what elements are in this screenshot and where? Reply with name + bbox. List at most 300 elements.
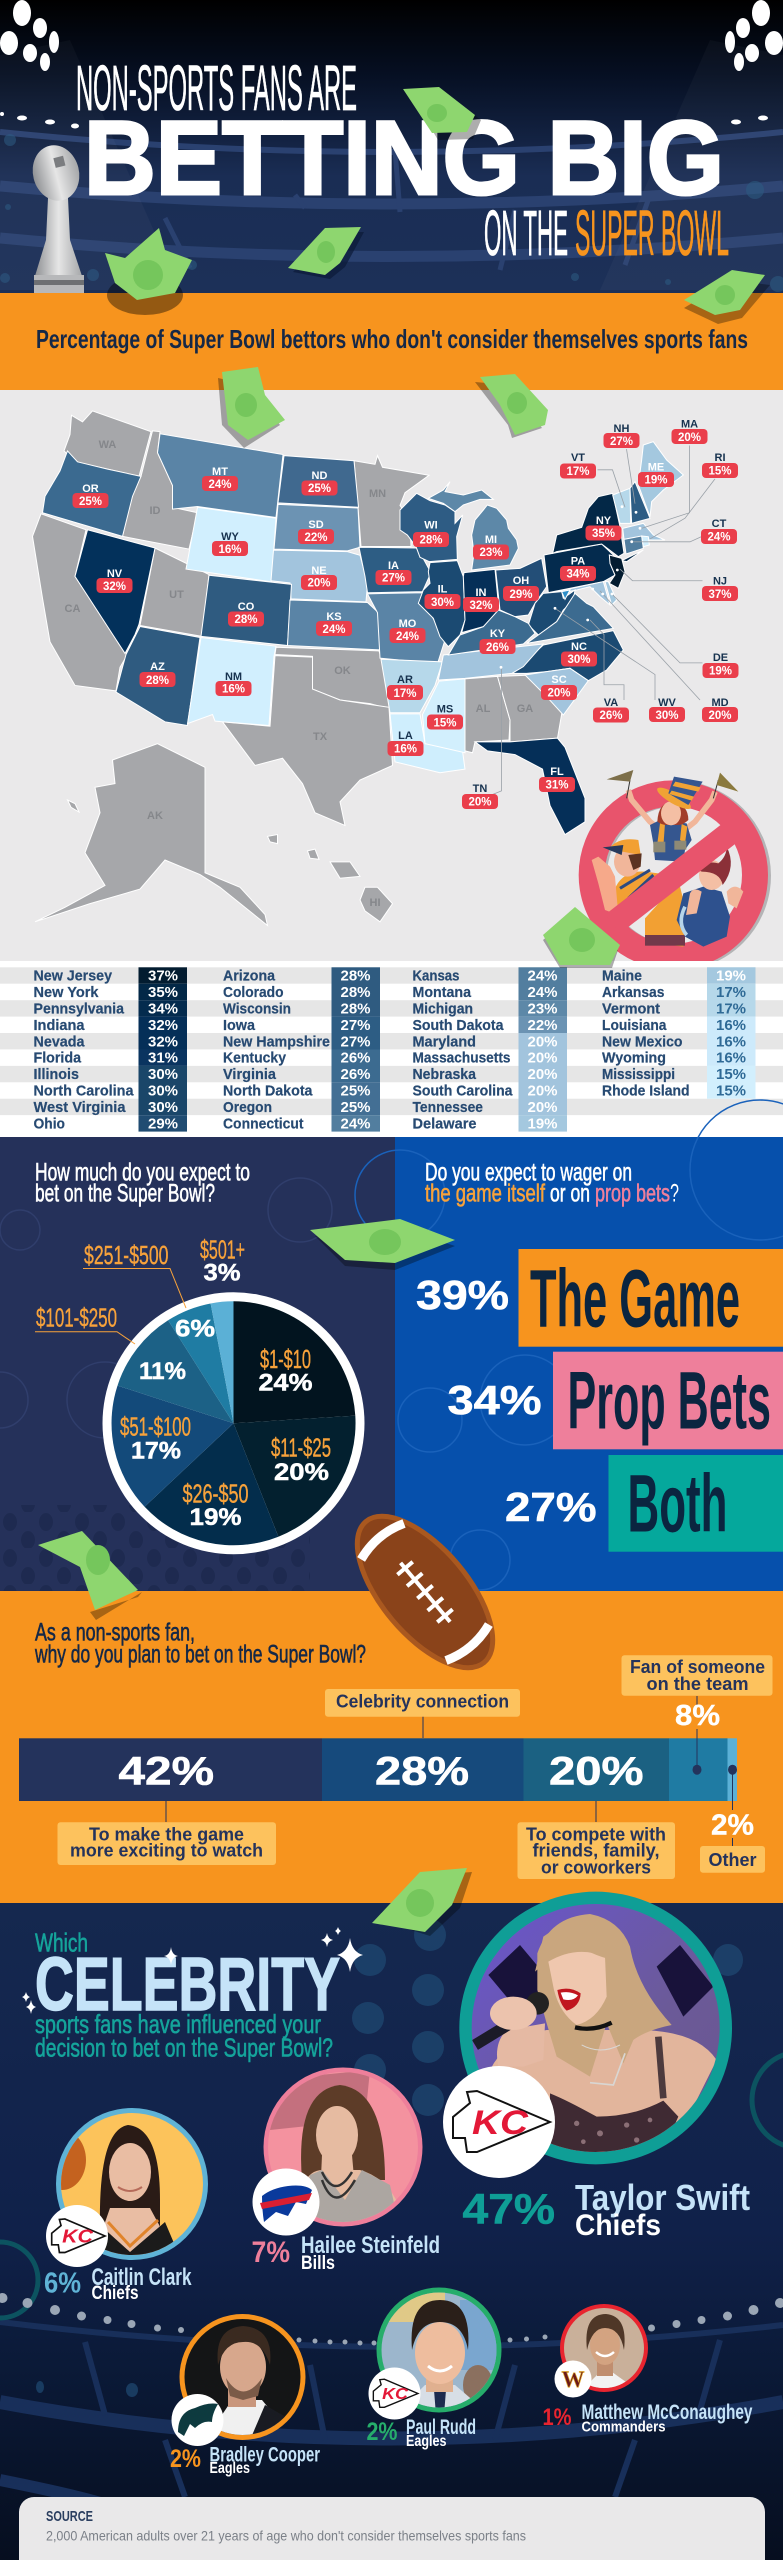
label: KY: 26%: [486, 642, 509, 654]
stat: 2% Paul Rudd Eagles: 2%: [366, 2418, 398, 2446]
table column 2: Connecticut: [223, 1115, 304, 1132]
label: DE: [702, 652, 738, 678]
label: MI: MI: [485, 534, 497, 546]
icon: trophy: [27, 140, 85, 293]
label: MI: [473, 534, 509, 560]
table column 3: 24%: [527, 968, 558, 984]
heading: wager question: Do you expect to wager on: [425, 1159, 632, 1187]
heading: which celebrity: Which: [35, 1928, 88, 1958]
label: DE: DE: [713, 652, 728, 664]
table column 3: Nebraska: [412, 1066, 477, 1083]
heading: bet amount question: How much do you expect to: [35, 1159, 250, 1187]
stat: 47% Taylor Swift Chiefs: Taylor Swift: [575, 2177, 750, 2218]
table column 2: Virginia: [223, 1066, 277, 1083]
bar: Prop Bets: [448, 1352, 783, 1449]
stacked bar chart: reasons: 20%: [549, 1749, 644, 1793]
table column 1: 30%: [148, 1099, 178, 1116]
table column 3: 23%: [527, 1000, 558, 1017]
label: NY: 35%: [592, 528, 615, 540]
icon: money bill, map top left: [218, 367, 285, 448]
table column 2: [223, 967, 380, 1132]
table column 1: 30%: [148, 1066, 178, 1083]
panel: map background: [0, 390, 783, 961]
heading: bet amount question: bet on the Super Bowl?: [35, 1180, 215, 1208]
panel: why bet: [0, 1591, 783, 1903]
callout: other: 2%: [711, 1809, 754, 1841]
table column 4: [602, 967, 756, 1100]
map: eastern states: [400, 442, 683, 715]
label: NV: 32%: [103, 581, 126, 593]
callout: to compete: or coworkers: [541, 1857, 651, 1877]
table column 2: 27%: [340, 1033, 371, 1050]
callout: fan of someone on the team: [622, 1655, 772, 1775]
table column 3: 20%: [527, 1083, 558, 1100]
label: MT: 24%: [208, 479, 232, 491]
callout: celebrity connection: Celebrity connection: [336, 1692, 509, 1712]
callout: $501+: [200, 1234, 245, 1287]
table column 1: Illinois: [34, 1066, 79, 1083]
pie chart: bet amounts: [35, 1234, 364, 1554]
label: NC: [561, 641, 597, 666]
label: RI: RI: [714, 452, 726, 464]
callout: $251-$500: $251-$500: [84, 1240, 168, 1270]
label: CT: 24%: [707, 532, 731, 544]
table column 2: Kentucky: [223, 1050, 287, 1067]
table column 3: Kansas: [412, 968, 460, 984]
stat: 2% Paul Rudd Eagles: Paul Rudd: [406, 2416, 476, 2439]
label: WV: 30%: [655, 710, 679, 722]
callout: other: [700, 1765, 765, 1873]
table column 4: 16%: [716, 1033, 746, 1050]
stacked bar chart: reasons: 28%: [375, 1749, 469, 1793]
map: state value badges: [72, 418, 738, 809]
celebrity: Hailee Steinfeld: [252, 2068, 440, 2274]
icon: sparkles: [22, 1927, 363, 2014]
label: MO: 24%: [396, 631, 419, 643]
slice label: $1-$10: 24%: [258, 1370, 312, 1397]
label: NM: NM: [225, 671, 242, 683]
label: WY: 16%: [218, 544, 242, 556]
label: IN: 32%: [469, 600, 493, 612]
label: NJ: [702, 576, 738, 601]
label: KY: KY: [490, 628, 506, 640]
label: MA: MA: [681, 418, 698, 430]
table column 2: 28%: [340, 1000, 371, 1017]
label: LA: 16%: [394, 744, 417, 756]
label: IL: [424, 584, 460, 609]
stat: 1% Matthew McConaughey Commanders: [542, 2401, 753, 2436]
label: NE: 20%: [307, 578, 331, 590]
map: grey state labels: GA: [517, 703, 533, 715]
photo: Matthew McConaughey: [564, 2308, 644, 2388]
callout: $501+: 3%: [204, 1260, 240, 1287]
heading: which celebrity: sports fans have influenced your: [35, 2009, 321, 2039]
label: AR: AR: [397, 674, 413, 686]
label: SD: 22%: [304, 532, 328, 544]
table column 4: 17%: [716, 984, 746, 1001]
label: PA: 34%: [566, 568, 590, 580]
callout: $101-$250: $101-$250: [36, 1303, 117, 1333]
label: MS: 15%: [433, 718, 457, 730]
table column 4: 19%: [716, 968, 746, 984]
label: VA: 26%: [599, 710, 623, 722]
table column 1: Florida: [34, 1050, 82, 1067]
slice label: 11%: 11%: [139, 1358, 186, 1385]
callout: celebrity connection: [325, 1689, 520, 1738]
heading: wager question: or on: [550, 1180, 590, 1208]
label: NH: [604, 423, 640, 448]
icon: Chiefs logo: KC: [62, 2226, 94, 2247]
slice label: $51-$100: 17%: [131, 1437, 181, 1464]
table column 2: 28%: [340, 968, 371, 984]
callout: to make the game more exciting: more exciting to watch: [70, 1841, 263, 1861]
label: CO: 28%: [234, 614, 258, 626]
table column 1: Ohio: [34, 1115, 65, 1132]
photo: Caitlin Clark: [61, 2113, 203, 2255]
label: VA: VA: [604, 697, 618, 709]
slice label: $11-$25: 20%: [274, 1459, 329, 1486]
slice label: $26-$50: 19%: [190, 1504, 242, 1531]
label: CT: [701, 518, 737, 544]
stacked bar chart: reasons: [19, 1738, 737, 1801]
icon: Chiefs logo: KC: [382, 2386, 409, 2403]
table column 1: [34, 967, 187, 1132]
celebrity: Bradley Cooper: [170, 2314, 320, 2477]
label: VA: [593, 697, 629, 722]
label: WY: [212, 531, 248, 556]
table column 4: Louisiana: [602, 1017, 667, 1034]
table column 3: [412, 967, 567, 1132]
icon: money bill, right: [684, 270, 770, 324]
label: AZ: [140, 661, 176, 687]
map: grey state labels: AK: [147, 810, 163, 822]
label: ME: 19%: [644, 474, 668, 486]
stat: 2% Bradley Cooper Eagles: 2%: [170, 2445, 201, 2473]
label: MD: [702, 697, 738, 722]
table column 3: 20%: [527, 1066, 558, 1083]
table column 1: 31%: [148, 1050, 178, 1067]
table column 2: New Hampshire: [223, 1033, 330, 1050]
label: FL: [539, 766, 575, 792]
table column 1: 32%: [148, 1033, 178, 1050]
table column 3: 20%: [527, 1033, 558, 1050]
slice label: $26-$50: $26-$50: [182, 1478, 248, 1508]
label: ME: ME: [648, 462, 664, 474]
stat: 6% Caitlin Clark Chiefs: [44, 2264, 192, 2304]
panel: celebrity influence: [0, 1892, 783, 2560]
callout: $101-$250: [35, 1303, 135, 1344]
figure: man in orange cap: [592, 839, 658, 917]
heading: wager question: [425, 1159, 679, 1208]
heading: why bet question: As a non-sports fan,: [35, 1619, 195, 1647]
label: OH: 29%: [509, 589, 533, 601]
table column 3: 22%: [527, 1017, 558, 1034]
label: WV: [649, 697, 685, 722]
celebrity: Caitlin Clark: [38, 2108, 208, 2304]
label: TN: [462, 783, 498, 809]
map: grey state labels: CA: [65, 603, 80, 615]
label: WI: WI: [424, 520, 438, 532]
table column 3: Tennessee: [412, 1099, 483, 1116]
callout: to compete: To compete with: [526, 1825, 666, 1845]
table column 2: Oregon: [223, 1099, 272, 1116]
table column 1: West Virginia: [34, 1099, 126, 1116]
label: NM: [216, 671, 252, 696]
table column 3: Delaware: [412, 1115, 476, 1132]
label: WI: 28%: [419, 534, 443, 546]
table column 4: Maine: [602, 968, 642, 984]
panel: how much do you expect to bet: [0, 1137, 395, 1591]
title: [76, 52, 729, 269]
label: NV: [96, 568, 132, 593]
icon: Bills logo: [252, 2168, 320, 2236]
bar: The Game: [416, 1249, 783, 1347]
stat: 47% Taylor Swift Chiefs: [462, 2177, 750, 2242]
heading: wager question: the game itself: [425, 1180, 545, 1208]
callout: to make the game more exciting: [58, 1801, 276, 1865]
photo: Bradley Cooper: [184, 2319, 300, 2435]
icon: Chiefs logo: [443, 2066, 555, 2178]
label: CO: [228, 601, 264, 626]
callout: to make the game more exciting: To make the game: [89, 1825, 244, 1845]
table column 3: 24%: [527, 984, 558, 1001]
photo: Taylor Swift: [459, 1892, 732, 2164]
icon: money bill, pie bottom: [38, 1531, 142, 1620]
label: AR: [387, 674, 423, 700]
celebrity: Taylor Swift: [443, 1892, 750, 2242]
table column 1: New York: [34, 984, 99, 1001]
heading: which celebrity: decision to bet on the Super Bowl?: [35, 2033, 333, 2063]
figure: woman fan with hat and flags: [607, 770, 738, 862]
map: grey state labels: TX: [313, 731, 328, 743]
stacked bar chart: reasons: 42%: [118, 1749, 214, 1793]
table column 4: 16%: [716, 1017, 746, 1034]
panel: header: [0, 0, 783, 294]
table column 2: Wisconsin: [223, 1000, 291, 1017]
label: FL: FL: [550, 766, 564, 778]
slice label: $1-$10: [258, 1344, 312, 1397]
callout: $251-$500: [83, 1240, 186, 1308]
label: MS: MS: [437, 704, 453, 716]
label: MI: 23%: [479, 547, 503, 559]
label: AZ: 28%: [146, 675, 169, 687]
stat: 1% Matthew McConaughey Commanders: 1%: [542, 2404, 572, 2431]
map: grey state labels: UT: [169, 589, 184, 601]
icon: money bill, centre: [288, 227, 364, 279]
label: ND: [302, 470, 338, 496]
table column 1: Indiana: [34, 1017, 85, 1034]
table column 3: Massachusetts: [412, 1050, 510, 1067]
map: grey state labels: OK: [334, 665, 351, 677]
icon: Eagles logo: [172, 2394, 224, 2446]
label: KS: [316, 611, 352, 636]
label: MA: 20%: [678, 432, 701, 444]
table column 3: South Dakota: [412, 1017, 504, 1034]
stat: 47% Taylor Swift Chiefs: Chiefs: [575, 2209, 661, 2242]
label: SC: SC: [551, 674, 567, 686]
slice label: $51-$100: $51-$100: [120, 1412, 191, 1442]
label: LA: LA: [398, 730, 413, 742]
table column 3: 20%: [527, 1099, 558, 1116]
stat: 6% Caitlin Clark Chiefs: 6%: [44, 2268, 81, 2300]
icon: football: [333, 1494, 517, 1690]
slice label: $11-$25: [271, 1433, 331, 1486]
table column 3: Michigan: [412, 1000, 473, 1017]
table column 2: 25%: [340, 1099, 371, 1116]
label: KS: KS: [326, 611, 342, 623]
slice label: $11-$25: $11-$25: [271, 1433, 331, 1463]
celebrity: Matthew McConaughey: [542, 2304, 753, 2436]
slice label: $51-$100: [120, 1412, 191, 1464]
label: VT: VT: [571, 452, 585, 464]
stat: 7% Hailee Steinfeld Bills: [252, 2232, 440, 2274]
label: NY: NY: [596, 515, 612, 527]
label: VT: 17%: [566, 466, 590, 478]
table column 1: Nevada: [34, 1033, 85, 1050]
callout: fan of someone on the team: Fan of someone: [630, 1657, 765, 1677]
label: IA: [376, 560, 412, 585]
table column 2: 26%: [340, 1050, 371, 1067]
photo: Hailee Steinfeld: [268, 2072, 418, 2222]
table column 2: 28%: [340, 984, 371, 1001]
label: ND: 25%: [308, 483, 331, 495]
table column 2: Iowa: [223, 1017, 256, 1034]
illustration: crossed-out sports fans: [592, 770, 758, 958]
stat: 7% Hailee Steinfeld Bills: Bills: [301, 2253, 335, 2274]
label: KY: [480, 628, 516, 654]
table column 2: 26%: [340, 1066, 371, 1083]
label: SD: [298, 519, 334, 544]
callout: other: Other: [708, 1850, 756, 1870]
label: TN: 20%: [468, 796, 492, 808]
label: MT: MT: [212, 466, 228, 478]
photo: Paul Rudd: [382, 2292, 496, 2408]
label: AZ: AZ: [150, 661, 165, 673]
stat: 2% Bradley Cooper Eagles: Eagles: [210, 2460, 250, 2477]
heading: wager question: prop bets: [595, 1180, 670, 1208]
label: NM: 16%: [222, 684, 245, 696]
table column 4: Rhode Island: [602, 1083, 690, 1100]
label: IA: 27%: [382, 572, 405, 584]
map: grey state labels: MN: [369, 488, 386, 500]
source text: 2,000 American adults over 21 years of age who don't consider themselves sports fans: [46, 2528, 526, 2544]
table column 4: 17%: [716, 1000, 746, 1017]
icon: money bill, pie top: [310, 1219, 455, 1270]
table column 2: 27%: [340, 1017, 371, 1034]
icon: Chiefs logo: [368, 2368, 420, 2420]
icon: money bill, map top right: [475, 374, 548, 438]
table column 1: 34%: [148, 1000, 178, 1017]
table column 3: South Carolina: [412, 1083, 513, 1100]
icon: Commanders logo: W: [562, 2367, 584, 2392]
label: MS: [427, 704, 463, 730]
label: PA: PA: [571, 556, 585, 568]
map: western and central states: [32, 411, 585, 925]
heading: why bet question: why do you plan to bet on the Super Bowl?: [34, 1640, 366, 1668]
table column 3: 19%: [527, 1115, 558, 1132]
label: WV: WV: [658, 697, 677, 709]
label: RI: 15%: [708, 466, 732, 478]
label: OR: 25%: [79, 496, 102, 508]
label: CT: CT: [712, 518, 727, 530]
table column 1: Pennsylvania: [34, 1000, 125, 1017]
table column 3: Maryland: [412, 1033, 476, 1050]
table column 3: 20%: [527, 1050, 558, 1067]
label: OR: [72, 483, 108, 508]
label: MO: MO: [399, 618, 417, 630]
bar: Both: 27%: [505, 1484, 596, 1530]
table column 2: 24%: [340, 1115, 371, 1132]
map: grey state labels: WA: [99, 439, 116, 451]
table column 4: 16%: [716, 1050, 746, 1067]
bar: Both: [505, 1455, 783, 1552]
table column 4: New Mexico: [602, 1033, 682, 1050]
callout: fan of someone on the team: 8%: [675, 1700, 720, 1732]
figure: man with red hair: [645, 847, 743, 947]
icon: Commanders logo: [554, 2360, 592, 2398]
label: SC: 20%: [547, 688, 571, 700]
stat: 1% Matthew McConaughey Commanders: Commanders: [582, 2419, 666, 2436]
stat: 2% Paul Rudd Eagles: [366, 2416, 476, 2450]
stat: 2% Bradley Cooper Eagles: Bradley Cooper: [210, 2444, 320, 2467]
heading: which celebrity: [35, 1928, 340, 2063]
label: KS: 24%: [322, 624, 346, 636]
stat: 6% Caitlin Clark Chiefs: Caitlin Clark: [92, 2264, 192, 2291]
slice label: $1-$10: $1-$10: [260, 1344, 311, 1374]
label: ND: ND: [312, 470, 327, 482]
bar: The Game: 39%: [416, 1272, 509, 1318]
heading: why bet question: [34, 1619, 366, 1668]
table column 1: New Jersey: [34, 968, 113, 984]
label: LA: [388, 730, 424, 756]
table column 1: 37%: [148, 968, 178, 984]
bar: Prop Bets: 34%: [448, 1377, 542, 1423]
label: RI: [702, 452, 738, 478]
source heading: SOURCE: [46, 2508, 93, 2525]
label: FL: 31%: [545, 780, 569, 792]
callout: to compete: friends, family,: [532, 1841, 660, 1861]
label: MD: MD: [711, 697, 729, 709]
label: MD: 20%: [708, 710, 732, 722]
label: WI: [413, 520, 449, 547]
map: leader lines: [492, 445, 715, 795]
icon: money bill, celebrity section: [372, 1868, 472, 1936]
heading: bet amount question: [35, 1159, 250, 1208]
table column 4: 15%: [716, 1083, 746, 1100]
label: DE: 19%: [709, 666, 732, 678]
heading: wager question: ?: [670, 1180, 679, 1208]
label: SD: SD: [308, 519, 324, 531]
stat: 7% Hailee Steinfeld Bills: 7%: [252, 2236, 290, 2269]
callout: fan of someone on the team: on the team: [646, 1674, 748, 1694]
label: OH: OH: [513, 575, 529, 587]
stat: 2% Bradley Cooper Eagles: [170, 2444, 320, 2477]
stat: 6% Caitlin Clark Chiefs: Chiefs: [92, 2283, 138, 2304]
panel: source: [19, 2497, 765, 2560]
label: OH: [503, 575, 539, 601]
callout: to compete: [518, 1801, 675, 1879]
label: ME: [638, 462, 674, 487]
label: NE: NE: [311, 565, 327, 577]
label: NC: 30%: [567, 654, 591, 666]
icon: Chiefs logo: KC: [472, 2104, 529, 2142]
label: WY: WY: [221, 531, 240, 543]
table column 4: Wyoming: [602, 1050, 666, 1067]
label: SC: [541, 674, 577, 700]
table column 2: 25%: [340, 1083, 371, 1100]
table column 2: Colorado: [223, 984, 284, 1001]
label: NH: 27%: [610, 436, 633, 448]
